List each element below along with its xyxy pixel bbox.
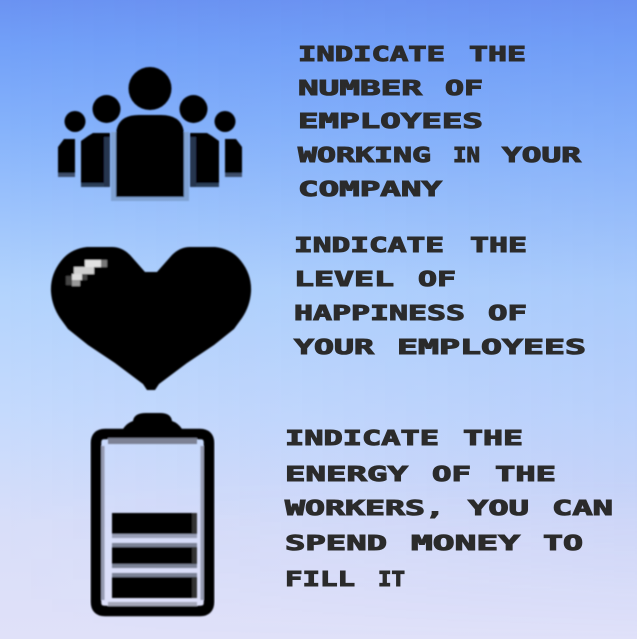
centre person bbox=[111, 67, 189, 201]
battery bar 3 bbox=[112, 573, 197, 598]
text: energy of the workers: YOU bbox=[468, 496, 529, 520]
text: number of employees: COMPANY bbox=[298, 177, 443, 201]
icon: group of employees bbox=[58, 67, 242, 201]
text: level of happiness: LEVEL bbox=[294, 267, 394, 291]
text: energy of the workers bbox=[285, 426, 613, 591]
text: number of employees: OF bbox=[445, 76, 483, 100]
text: number of employees: NUMBER bbox=[298, 76, 423, 100]
text: level of happiness: EMPLOYEES bbox=[397, 335, 586, 359]
text: energy of the workers: INDICATE bbox=[285, 426, 439, 450]
far right person bbox=[214, 111, 242, 177]
text: number of employees: INDICATE bbox=[298, 42, 445, 66]
text: energy of the workers: ENERGY bbox=[285, 462, 409, 486]
text: energy of the workers: OF bbox=[432, 462, 471, 486]
icon: heart bbox=[51, 247, 251, 390]
text: level of happiness: HAPPINESS bbox=[294, 301, 465, 325]
text: level of happiness: INDICATE bbox=[294, 233, 444, 257]
text: level of happiness: OF bbox=[488, 301, 527, 325]
text: energy of the workers: IT bbox=[378, 567, 405, 591]
text: number of employees: YOUR bbox=[502, 143, 582, 167]
battery cap bbox=[123, 413, 182, 433]
text: energy of the workers: WORKERS, bbox=[285, 496, 445, 520]
text: level of happiness: OF bbox=[418, 267, 456, 291]
text: number of employees: EMPLOYEES bbox=[298, 109, 483, 133]
text: number of employees: THE bbox=[469, 42, 526, 66]
right person bbox=[180, 95, 219, 187]
text: energy of the workers: FILL bbox=[285, 567, 355, 591]
text: number of employees: WORKING bbox=[298, 143, 431, 167]
text: level of happiness: YOUR bbox=[294, 335, 375, 359]
text: energy of the workers: THE bbox=[495, 462, 556, 486]
battery bar 2 bbox=[112, 543, 197, 568]
heart highlight bbox=[66, 260, 107, 286]
icon: battery bbox=[96, 413, 209, 611]
text: number of employees: IN bbox=[453, 143, 480, 167]
battery body bbox=[96, 434, 209, 611]
text: energy of the workers: THE bbox=[463, 426, 523, 450]
text: number of employees bbox=[298, 42, 582, 201]
text: level of happiness: THE bbox=[470, 233, 527, 257]
battery bar 1 bbox=[112, 513, 197, 538]
text: level of happiness bbox=[294, 233, 586, 359]
text: energy of the workers: CAN bbox=[552, 496, 613, 520]
text: energy of the workers: SPEND bbox=[285, 531, 387, 555]
text: energy of the workers: MONEY bbox=[411, 531, 521, 555]
text: energy of the workers: TO bbox=[543, 531, 583, 555]
far left person bbox=[58, 111, 86, 177]
left person bbox=[81, 95, 120, 187]
